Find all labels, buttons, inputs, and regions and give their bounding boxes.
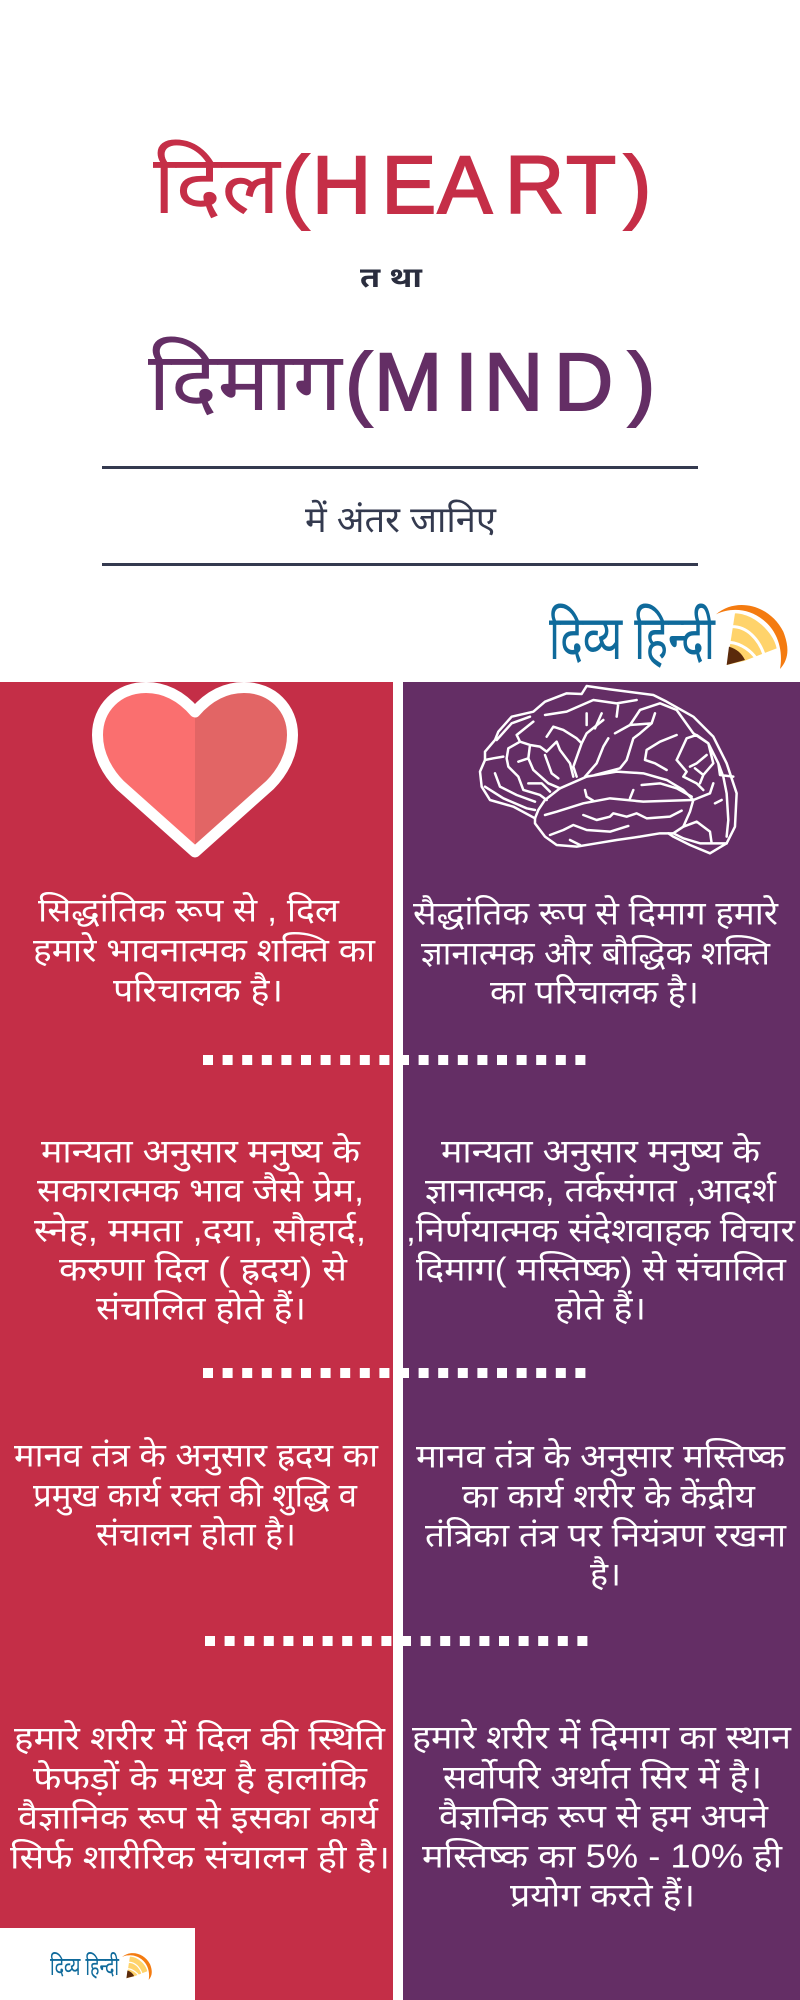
icon: heart: [98, 688, 292, 852]
text: mind row 3: का कार्य शरीर के केंद्रीय: [462, 1476, 756, 1514]
text: mind row 3: मानव तंत्र के अनुसार मस्तिष्क: [416, 1436, 786, 1476]
text: mind row 1: का परिचालक है।: [490, 972, 699, 1010]
text: heart row 4: फेफड़ों के मध्य है हालांकि: [33, 1758, 368, 1796]
panel: mind column: [403, 682, 800, 2000]
text: heart row 2: संचालित होते हैं।: [96, 1288, 306, 1326]
text: heart row 4: सिर्फ शारीरिक संचालन ही है।: [10, 1838, 390, 1876]
footer logo: दिव्य हिन्दी: [50, 1951, 120, 1981]
text: mind row 2: ज्ञानात्मक, तर्कसंगत ,आदर्श: [425, 1172, 777, 1208]
dotted divider 2: [203, 1368, 586, 1378]
text: heart row 2: [34, 1132, 366, 1326]
text: heart row 1: सिद्धांतिक रूप से , दिल: [38, 890, 340, 928]
text: mind row 4: [412, 1718, 792, 1914]
text: heart row 2: सकारात्मक भाव जैसे प्रेम,: [37, 1170, 364, 1208]
bottom rule: [102, 563, 698, 566]
text: mind row 2: दिमाग( मस्तिष्क) से संचालित: [416, 1250, 787, 1288]
footer logo: [0, 1928, 195, 2000]
top rule: [102, 466, 698, 469]
text: heart row 3: मानव तंत्र के अनुसार ह्रदय का: [14, 1436, 380, 1476]
text: heart row 3: [14, 1436, 380, 1552]
logo: top right: दिव्य हिन्दी: [549, 603, 716, 673]
text: mind row 3: है।: [590, 1554, 621, 1592]
title: mind: (MIND): [345, 337, 655, 428]
icon: brain: [480, 686, 737, 853]
connector word: त था: [360, 262, 423, 293]
text: mind row 2: मान्यता अनुसार मनुष्य के: [441, 1132, 761, 1172]
text: heart row 1: परिचालक है।: [113, 970, 283, 1008]
text: heart row 2: स्नेह, ममता ,दया, सौहार्द,: [34, 1210, 366, 1248]
text: mind row 4: मस्तिष्क का 5% - 10% ही: [422, 1838, 784, 1874]
title: heart: (HEART): [282, 140, 651, 231]
text: heart row 1: हमारे भावनात्मक शक्ति का: [33, 930, 377, 968]
title: mind: दिमाग: [148, 337, 344, 428]
text: mind row 1: [413, 894, 779, 1010]
text: mind row 4: प्रयोग करते हैं।: [510, 1876, 695, 1914]
text: mind row 2: ,निर्णयात्मक संदेशवाहक विचार: [406, 1210, 796, 1248]
text: mind row 4: हमारे शरीर में दिमाग का स्थान: [412, 1718, 792, 1756]
text: mind row 2: [406, 1132, 796, 1326]
text: heart row 3: संचालन होता है।: [96, 1514, 296, 1552]
dotted divider 3: [205, 1636, 588, 1646]
text: mind row 2: होते हैं।: [555, 1288, 646, 1326]
text: mind row 1: ज्ञानात्मक और बौद्धिक शक्ति: [421, 934, 771, 972]
subtitle: में अंतर जानिए: [305, 499, 497, 540]
text: mind row 4: वैज्ञानिक रूप से हम अपने: [439, 1796, 769, 1834]
text: heart row 4: [10, 1718, 390, 1876]
text: mind row 1: सैद्धांतिक रूप से दिमाग हमारे: [413, 894, 779, 932]
text: heart row 4: हमारे शरीर में दिल की स्थिति: [14, 1718, 386, 1756]
text: heart row 3: प्रमुख कार्य रक्त की शुद्धि व: [33, 1476, 358, 1516]
dotted divider 1: [203, 1055, 586, 1065]
text: heart row 4: वैज्ञानिक रूप से इसका कार्य: [18, 1798, 379, 1836]
text: mind row 4: सर्वोपरि अर्थात सिर में है।: [443, 1758, 762, 1796]
text: mind row 3: तंत्रिका तंत्र पर नियंत्रण रखना: [425, 1516, 788, 1554]
text: heart row 1: [33, 890, 377, 1008]
text: mind row 3: [416, 1436, 788, 1592]
text: heart row 2: करुणा दिल ( ह्रदय) से: [59, 1250, 348, 1288]
title: mind: [148, 337, 655, 428]
title: heart: दिल: [153, 140, 281, 231]
text: heart row 2: मान्यता अनुसार मनुष्य के: [41, 1132, 361, 1172]
panel: heart column: [0, 682, 393, 2000]
